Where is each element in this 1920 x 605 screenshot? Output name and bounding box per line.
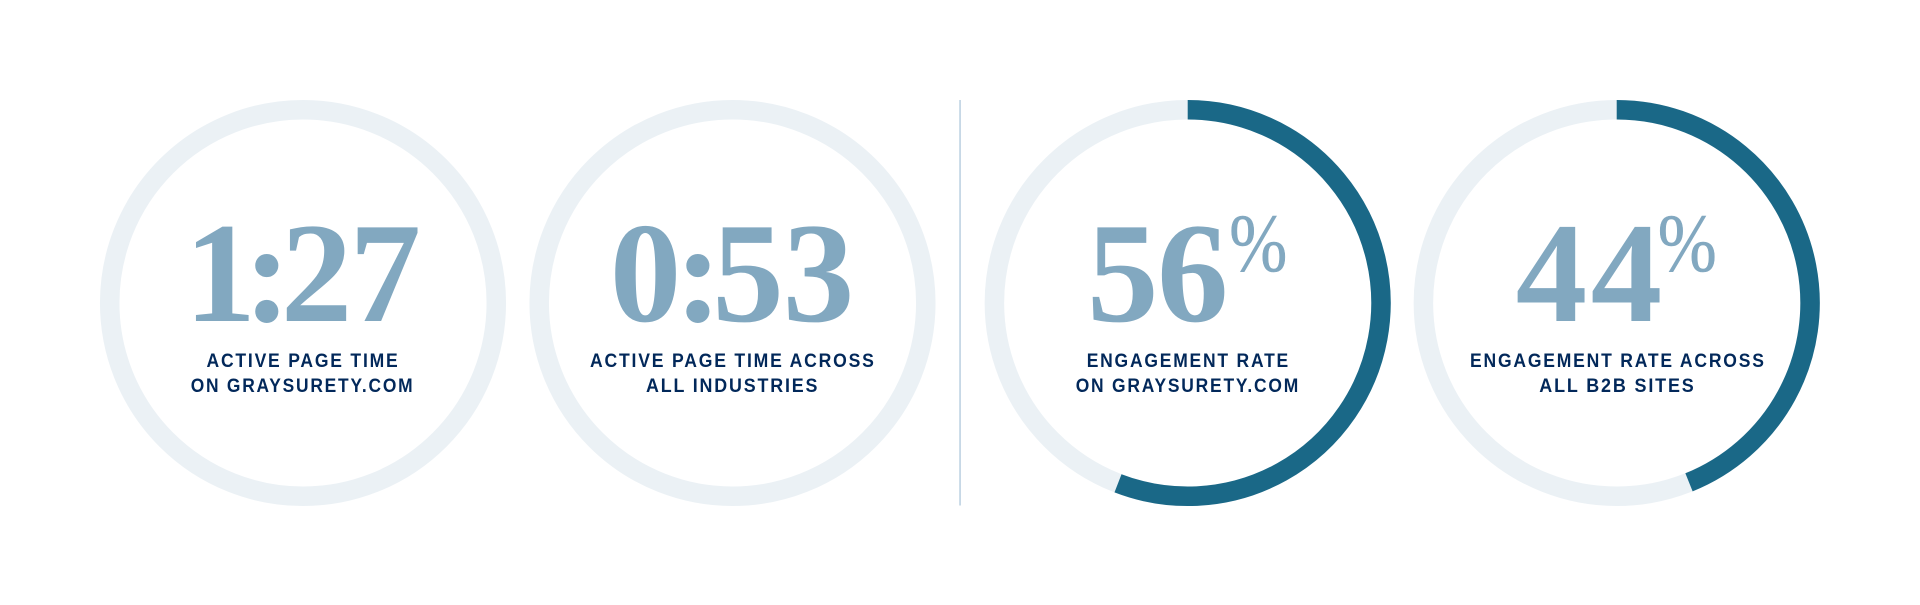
label: active page time across all industries: ALL INDUSTRIES: [646, 375, 819, 397]
label: active page time across all industries: [590, 350, 876, 397]
big number: 0:53: 0:53: [610, 194, 854, 352]
ring: track 3: [994, 110, 1381, 496]
label: engagement rate on graysurety.com: ON GRAYSURETY.COM: [1076, 375, 1300, 397]
panel: active page time across all industries: [539, 110, 926, 496]
label: active page time on graysurety.com: ON GRAYSURETY.COM: [191, 375, 414, 397]
big number: 1:27: 1:27: [184, 194, 421, 352]
label: engagement rate across all b2b sites: [1470, 350, 1766, 397]
ring: 44 percent arc: [1617, 110, 1810, 482]
label: engagement rate on graysurety.com: [1076, 350, 1300, 397]
ring: 56 percent arc: [1118, 110, 1381, 496]
big number: 44 percent: 44: [1516, 194, 1662, 352]
panel: engagement rate across all b2b sites: [1423, 110, 1810, 496]
ring: track 2: [539, 110, 926, 496]
big number: 56 percent: 56: [1087, 194, 1228, 352]
ring: track 1: [110, 110, 496, 496]
big number: 56 percent: %: [1229, 197, 1287, 289]
divider line: [959, 100, 961, 506]
label: active page time on graysurety.com: ACTIVE PAGE TIME: [206, 350, 400, 372]
label: engagement rate across all b2b sites: ALL B2B SITES: [1539, 375, 1696, 397]
panel: active page time on graysurety.com: [110, 110, 496, 496]
label: engagement rate across all b2b sites: ENGAGEMENT RATE ACROSS: [1470, 350, 1766, 372]
label: engagement rate on graysurety.com: ENGAGEMENT RATE: [1087, 350, 1290, 372]
ring: track 4: [1423, 110, 1810, 496]
panel: engagement rate on graysurety.com: [994, 110, 1381, 496]
label: active page time on graysurety.com: [191, 350, 414, 397]
label: active page time across all industries: ACTIVE PAGE TIME ACROSS: [590, 350, 876, 372]
big number: 44 percent: %: [1658, 197, 1717, 289]
